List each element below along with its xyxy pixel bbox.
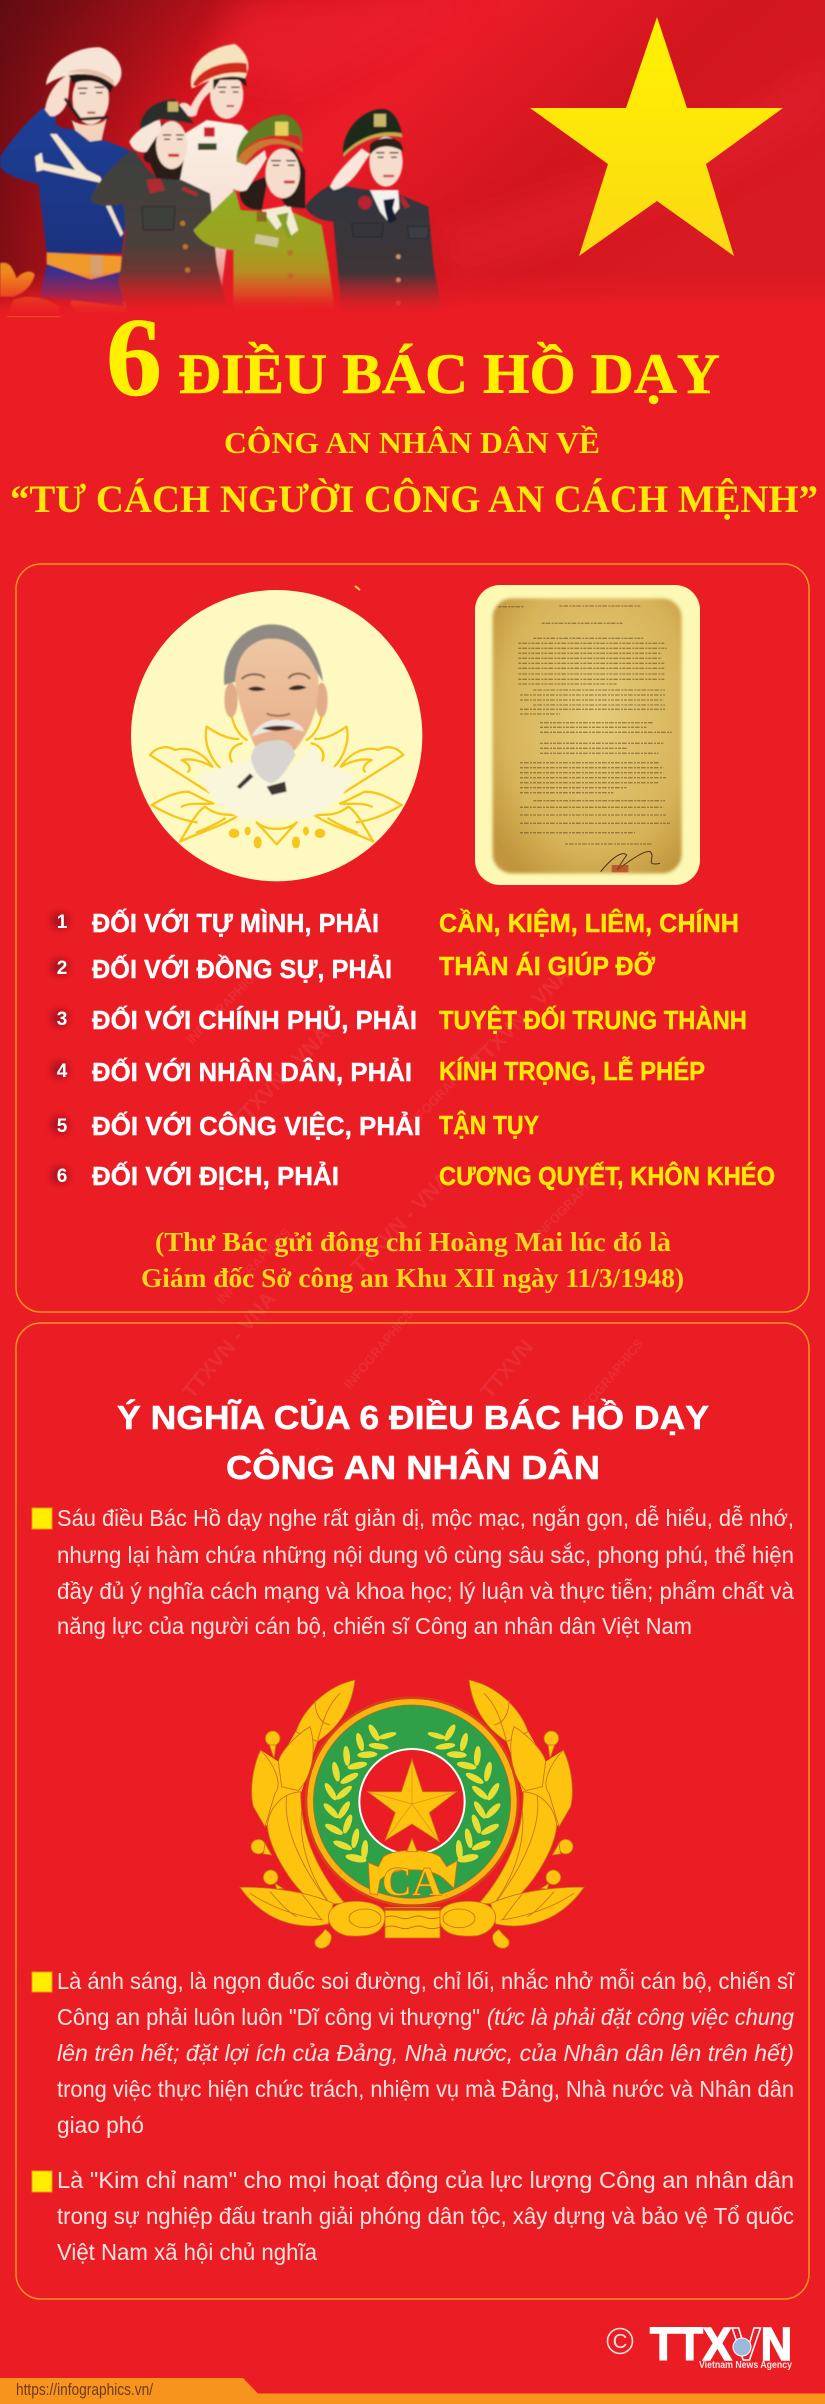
paragraph 1 <box>57 1505 795 1639</box>
paragraph 1: nhưng lại hàm chứa những nội dung vô cùng sâu sắc, phong phú, thể hiện <box>57 1542 794 1568</box>
footer bar with url <box>0 2378 825 2404</box>
icon: police emblem <box>240 1680 584 1948</box>
watermarks: TTXVN - VNA <box>178 1287 281 1403</box>
paragraph 2 <box>57 1968 795 2138</box>
row 4: ĐỐI VỚI NHÂN DÂN, PHẢI <box>92 1057 412 1087</box>
paragraph 2: Công an phải luôn luôn "Dĩ công vi thượng" <box>57 2004 480 2030</box>
logo: TTXVN copyright: C <box>613 2331 627 2353</box>
icon: bullet 1 <box>32 1508 52 1529</box>
row 6: ĐỐI VỚI ĐỊCH, PHẢI <box>92 1161 339 1191</box>
watermarks <box>183 963 612 1307</box>
paragraph 3: trong sự nghiệp đấu tranh giải phóng dân tộc, xây dựng và bảo vệ Tổ quốc <box>57 2203 794 2229</box>
watermarks: TTXVN <box>476 1336 538 1403</box>
heading: CÔNG AN NHÂN DÂN <box>226 1448 600 1486</box>
row 5: ĐỐI VỚI CÔNG VIỆC, PHẢI <box>92 1111 421 1141</box>
paragraph 1: năng lực của người cán bộ, chiến sĩ Công an nhân dân Việt Nam <box>57 1613 692 1639</box>
letter note: Giám đốc Sở công an Khu XII ngày 11/3/1948) <box>141 1263 684 1293</box>
heading <box>117 1399 709 1486</box>
header flag banner <box>0 0 825 314</box>
watermarks: INFOGRAPHICS <box>571 1336 647 1422</box>
watermarks: TTXVN - VNA <box>467 963 575 1073</box>
letter note: (Thư Bác gửi đông chí Hoàng Mai lúc đó là <box>155 1227 672 1257</box>
icon: yellow flag star <box>530 17 783 256</box>
small mark <box>355 586 360 590</box>
icon: police emblem: CA <box>382 1859 442 1905</box>
panel: meaning <box>16 1287 809 2299</box>
subtitle: CÔNG AN NHÂN DÂN VỀ <box>224 424 600 460</box>
row 3: ĐỐI VỚI CHÍNH PHỦ, PHẢI <box>92 1004 417 1035</box>
illustration: saluting police officers <box>0 44 442 317</box>
row 4: 4 <box>57 1061 68 1082</box>
paragraph 2: giao phó <box>57 2112 144 2138</box>
header fade into page <box>0 272 825 316</box>
row 3: TUYỆT ĐỐI TRUNG THÀNH <box>439 1005 747 1035</box>
icon: lotus outline <box>150 713 403 848</box>
row 6 <box>51 1161 775 1191</box>
icon: bullet 3 <box>32 2171 52 2192</box>
title <box>10 296 818 521</box>
watermarks <box>178 1287 647 1422</box>
logo: TTXVN copyright: TTXVN <box>650 2318 792 2370</box>
watermarks: INFOGRAPHICS <box>213 1225 294 1307</box>
row 1 <box>51 908 739 938</box>
row 5 <box>51 1110 539 1141</box>
row 2: THÂN ÁI GIÚP ĐỠ <box>439 951 656 981</box>
portrait <box>198 624 355 819</box>
officer dark female <box>90 149 227 307</box>
officer back white uniform <box>177 120 248 303</box>
row 1: ĐỐI VỚI TỰ MÌNH, PHẢI <box>92 908 379 938</box>
paragraph 2: Là ánh sáng, là ngọn đuốc soi đường, chỉ lối, nhắc nhở mỗi cán bộ, chiến sĩ <box>57 1968 795 1994</box>
title: 6 <box>106 296 162 420</box>
row 6: CƯƠNG QUYẾT, KHÔN KHÉO <box>439 1161 775 1191</box>
officer right <box>305 184 442 312</box>
watermarks: TTXVN - VNA <box>347 1168 455 1278</box>
row 4: KÍNH TRỌNG, LỄ PHÉP <box>439 1056 705 1086</box>
letter note <box>141 1227 684 1293</box>
watermarks: INFOGRAPHICS <box>403 1050 484 1132</box>
row 5: TẬN TỤY <box>439 1110 539 1140</box>
row 1: CẦN, KIỆM, LIÊM, CHÍNH <box>439 908 739 938</box>
heading: Ý NGHĨA CỦA 6 ĐIỀU BÁC HỒ DẠY <box>117 1399 709 1436</box>
row 4 <box>51 1056 705 1087</box>
paragraph 1: đầy đủ ý nghĩa cách mạng và khoa học; lý luận và thực tiễn; phẩm chất và <box>57 1578 795 1604</box>
paragraph 3: Là "Kim chỉ nam" cho mọi hoạt động của lực lượng Công an nhân dân <box>57 2167 794 2193</box>
row 1: 1 <box>57 912 68 933</box>
watermarks: TTXVN - VNA <box>227 1023 335 1133</box>
watermarks: INFOGRAPHICS <box>341 1306 417 1392</box>
watermarks: INFOGRAPHICS <box>531 1160 612 1242</box>
row 2: ĐỐI VỚI ĐỒNG SỰ, PHẢI <box>92 954 392 984</box>
panel: six teachings <box>16 564 809 1312</box>
footer bar with url: https://infographics.vn/ <box>16 2380 153 2399</box>
list: six duties <box>51 908 775 1191</box>
row 2 <box>51 951 656 984</box>
icon: bullet 2 <box>32 1972 52 1992</box>
paragraph 2: (tức là phải đặt công việc chung <box>487 2004 794 2030</box>
subtitle quote: “TƯ CÁCH NGƯỜI CÔNG AN CÁCH MỆNH” <box>10 476 818 521</box>
letter typed lines <box>498 606 672 844</box>
officer green female <box>193 189 335 313</box>
flowers <box>0 263 127 317</box>
row 3 <box>51 1004 747 1035</box>
paragraph 3: Việt Nam xã hội chủ nghĩa <box>57 2239 318 2265</box>
row 2: 2 <box>57 958 67 979</box>
officer dark female details <box>142 207 175 230</box>
paragraph 3 <box>57 2167 794 2265</box>
logo: TTXVN copyright: Vietnam News Agency <box>699 2359 792 2371</box>
portrait medallion <box>131 590 422 881</box>
row 3: 3 <box>57 1009 67 1030</box>
title: ĐIỀU BÁC HỒ DẠY <box>178 342 720 406</box>
row 6: 6 <box>57 1166 67 1187</box>
watermarks: INFOGRAPHICS <box>183 965 264 1047</box>
row 5: 5 <box>57 1116 68 1137</box>
paragraph 2: lên trên hết; đặt lợi ích của Đảng, Nhà nước, của Nhân dân lên trên hết) <box>57 2040 794 2066</box>
officer blue <box>0 107 143 253</box>
letter document <box>475 585 700 885</box>
